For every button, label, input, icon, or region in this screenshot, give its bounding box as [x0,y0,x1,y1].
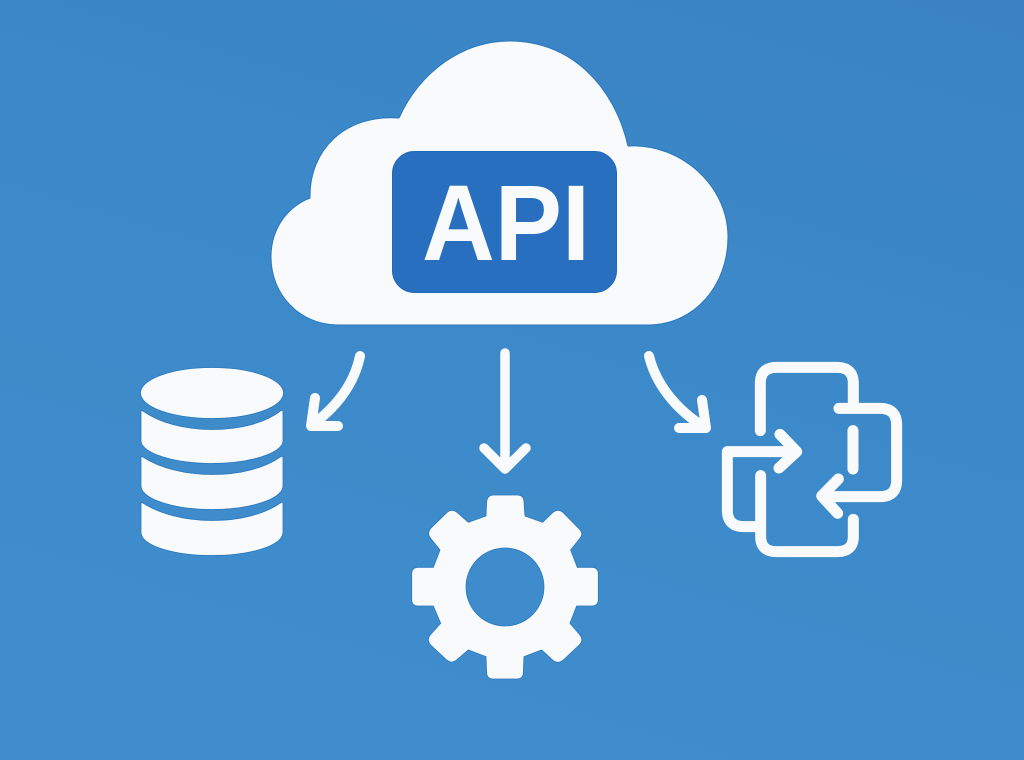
lower frame [761,476,853,552]
arrow: cloud to integration [649,356,706,428]
arrow: cloud to database [311,356,360,426]
icon: integration exchange [727,367,897,552]
right connector arrow [825,408,897,497]
left arrowhead [779,434,797,468]
right arrowhead [822,479,838,513]
icon: gear [412,495,598,679]
database upper tier [141,410,283,464]
database middle tier [141,456,283,510]
API label: API [422,162,590,283]
left connector arrow [727,452,794,527]
database top disk [140,368,284,418]
API badge [392,152,616,292]
arrow: cloud to gear [484,353,526,469]
icon: cloud [271,41,728,325]
middle dash [836,431,869,469]
upper frame [760,367,853,431]
database lower tier [141,502,283,556]
icon: database [140,368,284,556]
